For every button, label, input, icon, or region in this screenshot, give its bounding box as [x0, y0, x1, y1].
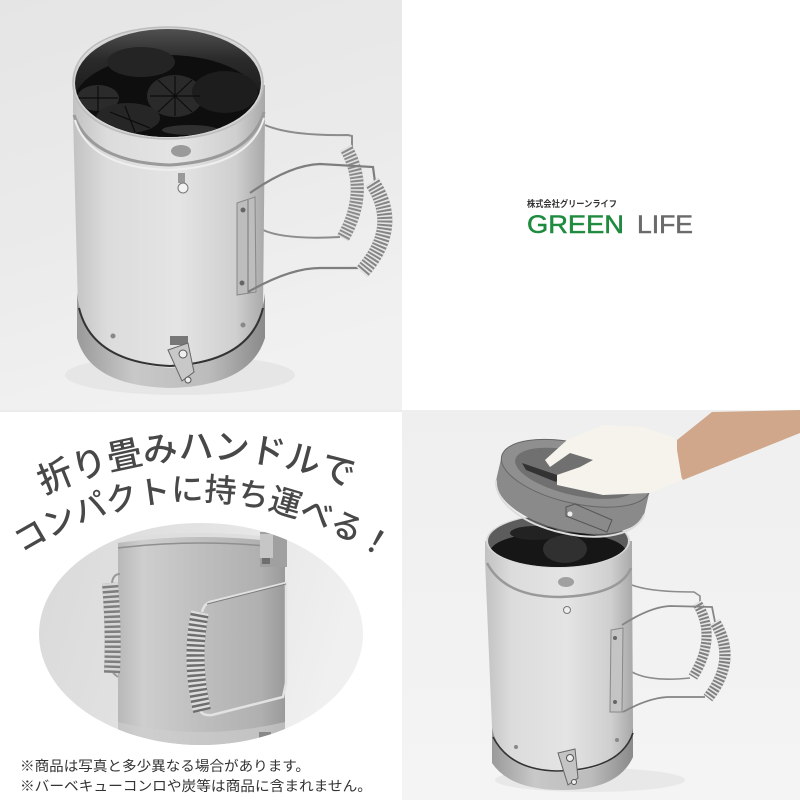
logo wordmark: GREEN: [527, 211, 624, 239]
curved headline: コンパクトに持ち運べる！: [16, 474, 384, 552]
spout dimple and screw: [171, 145, 191, 193]
panel: lid being lifted by gloved hand: [402, 410, 800, 800]
oval photo background: [39, 523, 363, 745]
back folding handle: [263, 125, 357, 238]
curved headline: [16, 433, 384, 552]
rivets: [110, 322, 246, 338]
curved headline: 折り畳みハンドルで: [36, 433, 355, 496]
company name: 株式会社グリーンライフ: [527, 198, 617, 209]
can rim ridge: [74, 112, 264, 165]
panel: product photo with charcoal: [0, 0, 402, 410]
logo wordmark: [527, 211, 693, 239]
can shadow: [65, 355, 295, 395]
front handle: [622, 606, 725, 712]
front wire handle: [200, 583, 286, 715]
dimple and screw: [558, 577, 574, 614]
rim ridge: [487, 563, 631, 597]
back handle: [632, 585, 707, 679]
top latch: [260, 532, 287, 567]
rivets and bottom latch: [514, 738, 619, 785]
arm: [677, 410, 800, 480]
base ring: [77, 293, 265, 388]
can mouth with charcoal: [486, 516, 630, 568]
charcoal pieces: [77, 47, 258, 135]
lid latch: [566, 504, 612, 532]
left coil grip: [110, 574, 120, 677]
base ring: [492, 727, 633, 790]
can body: [485, 541, 633, 772]
disclaimer notes: [20, 758, 372, 794]
disclaimer notes: ※バーベキューコンロや炭等は商品に含まれません。: [20, 778, 372, 794]
white glove: [545, 425, 682, 495]
panel: folding handle feature: [0, 410, 402, 794]
can shadow: [495, 768, 685, 792]
lid: [488, 427, 657, 550]
panel: logo: [402, 0, 800, 410]
can with folded handles: [118, 532, 287, 748]
bottom latch: [168, 336, 194, 383]
front coil grip: [195, 612, 202, 711]
can body: [73, 85, 265, 368]
front folding handle: [248, 164, 385, 292]
logo wordmark: LIFE: [637, 211, 693, 239]
bracket plate: [610, 628, 623, 712]
disclaimer notes: ※商品は写真と多少異なる場合があります。: [20, 758, 310, 774]
can mouth with charcoal: [72, 26, 264, 140]
bracket plate: [237, 197, 256, 295]
